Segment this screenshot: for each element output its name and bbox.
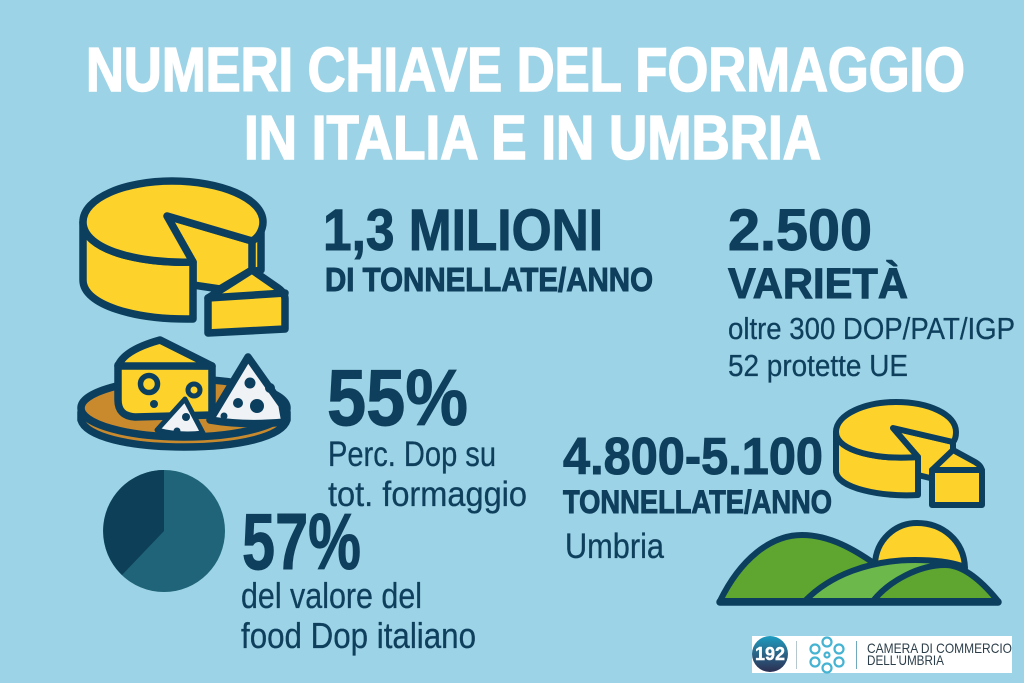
stat: 4.800-5.100 Umbria <box>563 428 832 566</box>
stat: 55%: Perc. Dop su <box>328 435 496 474</box>
stat: 1,3 milioni: 1,3 MILIONI <box>323 198 603 263</box>
chart: pie 57% <box>103 470 225 592</box>
stat: 57%: 57% <box>242 497 361 586</box>
stat: 1,3 milioni <box>323 198 653 298</box>
stat: 1,3 milioni: DI TONNELLATE/ANNO <box>325 261 653 298</box>
stat: 55% <box>327 353 527 514</box>
stat: 2.500 varietà: 52 protette UE <box>728 348 908 383</box>
logo badge: 192 <box>752 636 788 672</box>
stat: 2.500 varietà: 2.500 <box>728 198 872 263</box>
logo text: DELL'UMBRIA <box>867 652 945 668</box>
stat: 2.500 varietà <box>728 198 1015 383</box>
stat: 4.800-5.100 Umbria: 4.800-5.100 <box>563 428 823 486</box>
title <box>86 36 965 173</box>
logo text <box>867 640 1012 668</box>
logo emblem: rosette <box>810 638 844 672</box>
stat: 55%: 55% <box>327 353 468 442</box>
icon: small cheese wheel <box>836 402 982 505</box>
stat: 57%: del valore del <box>241 575 422 616</box>
stat: 57% <box>241 497 476 656</box>
logo: Camera di Commercio dell'Umbria <box>752 636 1012 673</box>
stat: 57%: food Dop italiano <box>241 615 476 656</box>
stat: 4.800-5.100 Umbria: Umbria <box>565 527 664 566</box>
stat: 55%: tot. formaggio <box>328 475 527 514</box>
stat: 4.800-5.100 Umbria: TONNELLATE/ANNO <box>563 484 832 520</box>
icon: green hills and sun <box>720 523 998 602</box>
icon: cheese wheel with slice <box>83 181 285 333</box>
logo badge: 192: 192 <box>755 644 785 664</box>
stat: 2.500 varietà: VARIETÀ <box>728 260 908 308</box>
icon: cheese board <box>81 340 287 447</box>
title: IN ITALIA E IN UMBRIA <box>244 104 821 173</box>
